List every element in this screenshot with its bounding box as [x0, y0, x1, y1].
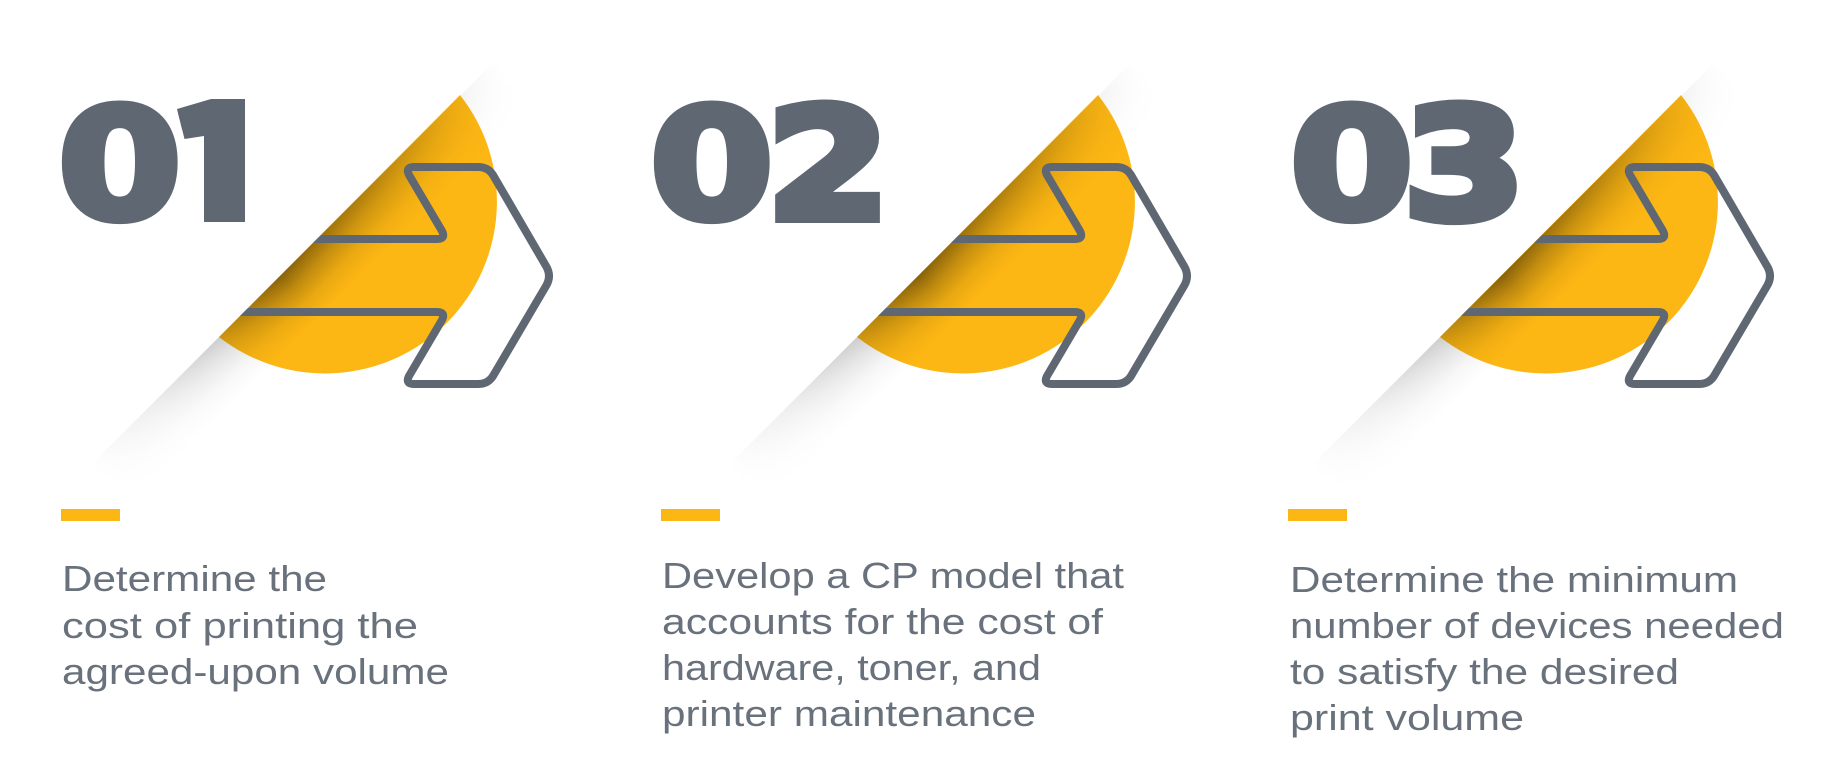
- text block: number of devices needed: [1290, 605, 1784, 646]
- number 02: 2: [767, 76, 889, 254]
- text block: hardware, toner, and: [662, 647, 1041, 688]
- accent bar: [661, 509, 720, 521]
- number 03: [1290, 76, 1525, 255]
- text block: Determine the minimum: [1290, 559, 1738, 600]
- panel: step 03: [1288, 61, 1784, 738]
- number 01: 0: [58, 77, 181, 255]
- text block: accounts for the cost of: [662, 601, 1104, 642]
- text block: agreed-upon volume: [62, 651, 449, 692]
- panel: step 01: [58, 61, 555, 692]
- number 03: 0: [1290, 77, 1413, 255]
- accent bar: [1288, 509, 1347, 521]
- accent bar: [61, 509, 120, 521]
- icon: circle with shadow and arrow: [1340, 86, 1774, 438]
- text block: [662, 555, 1124, 734]
- number 01: 1: [151, 76, 283, 254]
- text block: printer maintenance: [662, 693, 1036, 734]
- number 02: [650, 76, 889, 255]
- icon: circle with shadow and arrow: [120, 86, 554, 438]
- number 02: 0: [650, 77, 773, 255]
- icon: circle with shadow and arrow: [758, 86, 1192, 438]
- number 03: 3: [1404, 76, 1525, 254]
- text block: Develop a CP model that: [662, 555, 1124, 596]
- text block: print volume: [1290, 697, 1524, 738]
- text block: [1290, 559, 1784, 738]
- text block: [62, 558, 449, 692]
- panel: step 02: [650, 61, 1193, 734]
- number 01: [62, 99, 245, 224]
- text block: Determine the: [62, 558, 327, 599]
- text block: cost of printing the: [62, 605, 418, 646]
- text block: to satisfy the desired: [1290, 651, 1679, 692]
